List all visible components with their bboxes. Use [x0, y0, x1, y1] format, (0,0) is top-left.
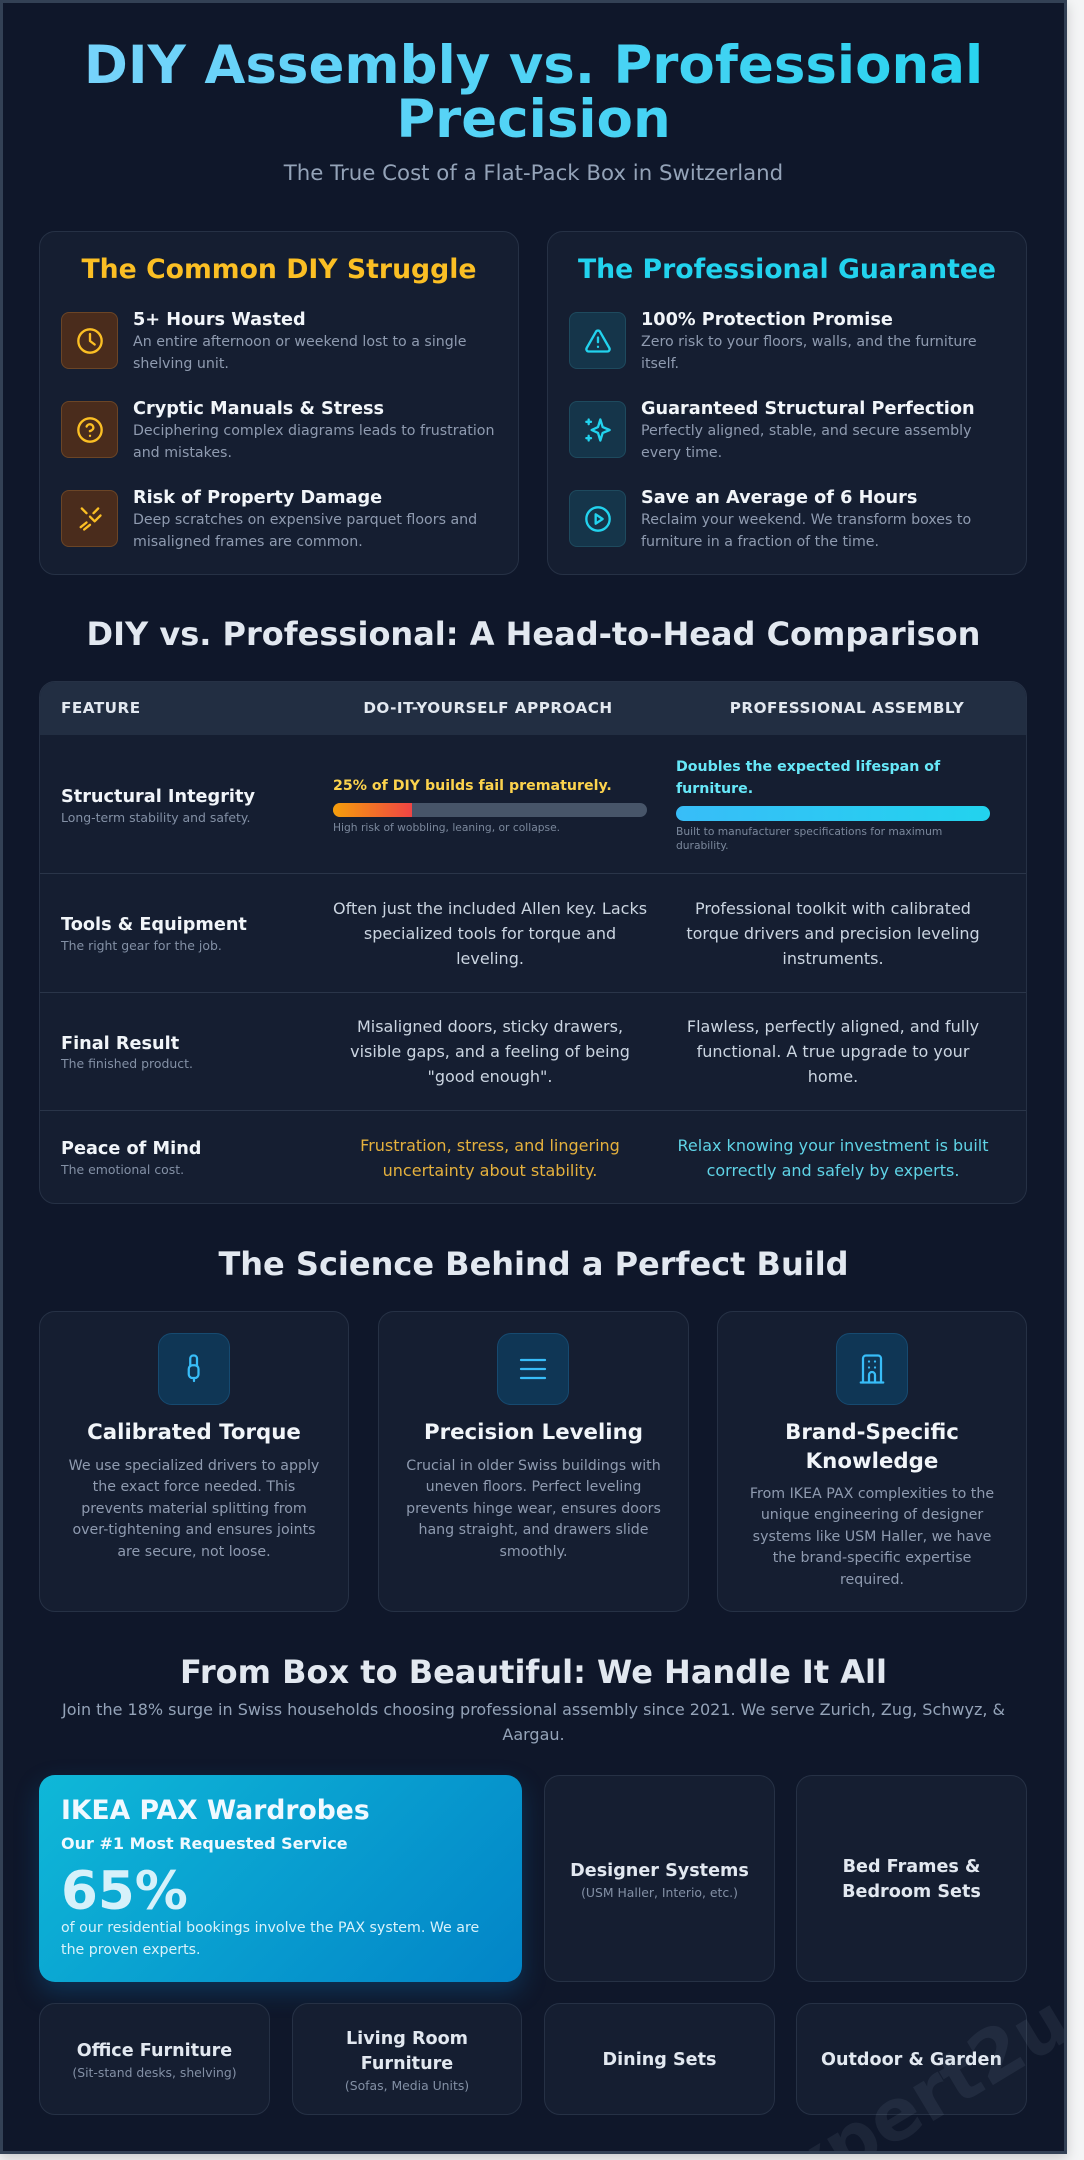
- item description: itself.: [641, 356, 679, 372]
- table header: [40, 682, 1026, 735]
- card text: prevents material splitting from: [81, 1501, 307, 1517]
- feature note: Long-term stability and safety.: [61, 810, 250, 825]
- icon: torque driver: [158, 1333, 230, 1405]
- card text: unique engineering of designer: [761, 1507, 983, 1523]
- card text: smoothly.: [500, 1544, 567, 1560]
- tile: designer systems: [544, 1775, 775, 1982]
- DIY cell: Frustration, stress, and lingering: [360, 1136, 620, 1155]
- tile title: Office Furniture: [77, 2041, 232, 2061]
- card text: over-tightening and ensures joints: [72, 1522, 316, 1538]
- professional cell: Relax knowing your investment is built: [678, 1136, 988, 1155]
- tile title: Furniture: [361, 2054, 453, 2074]
- DIY cell: leveling.: [456, 949, 524, 968]
- DIY cell: [333, 899, 647, 968]
- item description: Deep scratches on expensive parquet floors and: [133, 512, 477, 528]
- item description: [133, 334, 466, 372]
- item: save hours: [569, 488, 971, 550]
- tile: office furniture: [39, 2003, 270, 2115]
- row: structural integrity: [61, 759, 990, 852]
- panel: DIY struggle: [39, 231, 519, 575]
- tile title: Bedroom Sets: [842, 1882, 981, 1902]
- feature label: Structural Integrity: [61, 787, 255, 807]
- icon: question: [61, 401, 118, 458]
- row: peace of mind: [40, 1110, 1026, 1204]
- DIY cell: Misaligned doors, sticky drawers,: [357, 1017, 623, 1036]
- item description: shelving unit.: [133, 356, 229, 372]
- card title: Precision Leveling: [424, 1420, 643, 1445]
- card title: Brand-Specific: [785, 1420, 959, 1445]
- card text: Crucial in older Swiss buildings with: [406, 1458, 661, 1474]
- item: protection: [569, 310, 977, 372]
- DIY stat: 25% of DIY builds fail prematurely.: [333, 778, 612, 794]
- feature label: Peace of Mind: [61, 1139, 201, 1159]
- panel: brand knowledge: [717, 1311, 1027, 1612]
- heading: services: From Box to Beautiful: We Handle It All: [180, 1653, 887, 1691]
- feature label: Tools & Equipment: [61, 915, 247, 935]
- tile title: [842, 1856, 981, 1902]
- item description: every time.: [641, 445, 722, 461]
- professional bar note: [676, 825, 942, 852]
- professional cell: functional. A true upgrade to your: [697, 1042, 969, 1061]
- column: feature: FEATURE: [61, 699, 141, 717]
- card text: [69, 1458, 319, 1560]
- tile text: of our residential bookings involve the PAX system. We are: [61, 1920, 479, 1936]
- DIY bar note: High risk of wobbling, leaning, or collapse.: [333, 821, 560, 834]
- tile title: Bed Frames &: [843, 1856, 980, 1876]
- professional stat: Doubles the expected lifespan of: [676, 759, 940, 775]
- tile note: (Sofas, Media Units): [345, 2078, 469, 2092]
- item title: 5+ Hours Wasted: [133, 310, 306, 330]
- services intro: Join the 18% surge in Swiss households choosing professional assembly since 2021. We serve Zurich, Zug, Schwyz, &: [62, 1700, 1005, 1719]
- item: structural perfection: [569, 399, 975, 461]
- professional cell: correctly and safely by experts.: [707, 1161, 959, 1180]
- DIY cell: "good enough".: [428, 1067, 552, 1086]
- DIY cell: [360, 1136, 620, 1180]
- subtitle: The True Cost of a Flat-Pack Box in Switzerland: [284, 161, 783, 186]
- card text: the brand-specific expertise: [773, 1550, 971, 1566]
- card text: required.: [840, 1572, 904, 1588]
- professional cell: Professional toolkit with calibrated: [695, 899, 971, 918]
- panel: professional guarantee: [547, 231, 1027, 575]
- icon: broken pieces: [61, 490, 118, 547]
- big stat: 65%: [61, 1861, 188, 1922]
- DIY cell: Often just the included Allen key. Lacks: [333, 899, 647, 918]
- icon: sparkles: [569, 401, 626, 458]
- DIY cell: visible gaps, and a feeling of being: [350, 1042, 630, 1061]
- item description: Deciphering complex diagrams leads to frustration: [133, 423, 494, 439]
- item title: Cryptic Manuals & Stress: [133, 399, 384, 419]
- professional stat: [676, 759, 940, 797]
- tile note: (Sit-stand desks, shelving): [72, 2065, 237, 2080]
- icon: level lines: [497, 1333, 569, 1405]
- card text: the exact force needed. This: [93, 1479, 295, 1495]
- professional cell: [687, 1017, 979, 1086]
- item description: An entire afternoon or weekend lost to a single: [133, 334, 466, 350]
- card text: [750, 1486, 994, 1588]
- DIY cell: uncertainty about stability.: [383, 1161, 597, 1180]
- tile title: IKEA PAX Wardrobes: [61, 1795, 370, 1826]
- heading: professional guarantee: The Professional Guarantee: [578, 254, 996, 285]
- icon: clock: [61, 312, 118, 369]
- panel: precision leveling: [378, 1311, 689, 1612]
- icon: play circle: [569, 490, 626, 547]
- professional cell: [686, 899, 980, 968]
- item description: Perfectly aligned, stable, and secure assembly: [641, 423, 971, 439]
- feature note: The finished product.: [61, 1056, 193, 1071]
- card text: hang straight, and drawers slide: [418, 1522, 648, 1538]
- tile subtitle: Our #1 Most Requested Service: [61, 1834, 348, 1853]
- item: hours wasted: [61, 310, 466, 372]
- tile title: Living Room: [346, 2028, 468, 2048]
- card title: Knowledge: [806, 1449, 938, 1474]
- item title: 100% Protection Promise: [641, 310, 893, 330]
- card title: Calibrated Torque: [87, 1420, 301, 1445]
- panel: calibrated torque: [39, 1311, 349, 1612]
- card text: uneven floors. Perfect leveling: [426, 1479, 641, 1495]
- DIY progress bar: [333, 803, 647, 817]
- item description: Reclaim your weekend. We transform boxes to: [641, 512, 971, 528]
- tile: outdoor and garden: [796, 2003, 1027, 2115]
- item title: Guaranteed Structural Perfection: [641, 399, 975, 419]
- card text: We use specialized drivers to apply: [69, 1458, 319, 1474]
- tile title: Outdoor & Garden: [821, 2050, 1002, 2070]
- tile: living room: [292, 2003, 522, 2115]
- icon: building: [836, 1333, 908, 1405]
- heading: science: The Science Behind a Perfect Build: [218, 1245, 849, 1283]
- item description: and mistakes.: [133, 445, 232, 461]
- professional bar note: Built to manufacturer specifications for maximum: [676, 825, 942, 838]
- title: Precision: [396, 89, 671, 150]
- card text: prevents hinge wear, ensures doors: [406, 1501, 661, 1517]
- column: professional: PROFESSIONAL ASSEMBLY: [730, 699, 964, 717]
- feature tile: IKEA PAX: [39, 1775, 522, 1982]
- services intro: [61, 1700, 1005, 1744]
- card text: From IKEA PAX complexities to the: [750, 1486, 994, 1502]
- item description: misaligned frames are common.: [133, 534, 363, 550]
- professional cell: home.: [808, 1067, 858, 1086]
- column: DIY: DO-IT-YOURSELF APPROACH: [363, 699, 613, 717]
- item description: [641, 334, 977, 372]
- professional stat: furniture.: [676, 781, 753, 797]
- heading: comparison: DIY vs. Professional: A Head-to-Head Comparison: [87, 615, 980, 653]
- icon: warning triangle: [569, 312, 626, 369]
- row: tools: [40, 873, 1026, 992]
- card text: [406, 1458, 661, 1560]
- professional cell: torque drivers and precision leveling: [686, 924, 980, 943]
- tile text: the proven experts.: [61, 1942, 201, 1958]
- card text: are secure, not loose.: [117, 1544, 271, 1560]
- item description: [133, 423, 494, 461]
- feature note: The right gear for the job.: [61, 938, 222, 953]
- comparison table: [39, 681, 1027, 1204]
- services intro: Aargau.: [502, 1725, 565, 1744]
- heading: DIY struggle: The Common DIY Struggle: [81, 254, 477, 285]
- professional cell: instruments.: [782, 949, 884, 968]
- tile note: (USM Haller, Interio, etc.): [581, 1884, 738, 1900]
- feature note: The emotional cost.: [61, 1162, 184, 1177]
- DIY cell: specialized tools for torque and: [364, 924, 616, 943]
- item: cryptic manuals: [61, 399, 494, 461]
- card title: [785, 1420, 959, 1474]
- item description: furniture in a fraction of the time.: [641, 534, 879, 550]
- item description: [641, 423, 971, 461]
- tile title: [346, 2028, 468, 2074]
- professional bar note: durability.: [676, 839, 729, 852]
- tile: bed frames: [796, 1775, 1027, 1982]
- DIY bar fill: [333, 803, 412, 817]
- tile title: Dining Sets: [603, 2050, 716, 2070]
- professional cell: Flawless, perfectly aligned, and fully: [687, 1017, 979, 1036]
- item title: Save an Average of 6 Hours: [641, 488, 917, 508]
- item: property damage: [61, 488, 477, 550]
- tile text: [61, 1920, 479, 1958]
- item title: Risk of Property Damage: [133, 488, 382, 508]
- DIY cell: [350, 1017, 630, 1086]
- item description: [641, 512, 971, 550]
- tile title: Designer Systems: [570, 1860, 749, 1880]
- professional cell: [678, 1136, 988, 1180]
- item description: Zero risk to your floors, walls, and the furniture: [641, 334, 977, 350]
- title: [3, 39, 1064, 147]
- card text: systems like USM Haller, we have: [753, 1529, 991, 1545]
- tile: dining sets: [544, 2003, 775, 2115]
- item description: [133, 512, 477, 550]
- professional progress bar: [676, 806, 990, 821]
- feature label: Final Result: [61, 1034, 179, 1054]
- title: DIY Assembly vs. Professional: [84, 35, 983, 96]
- row: final result: [40, 992, 1026, 1110]
